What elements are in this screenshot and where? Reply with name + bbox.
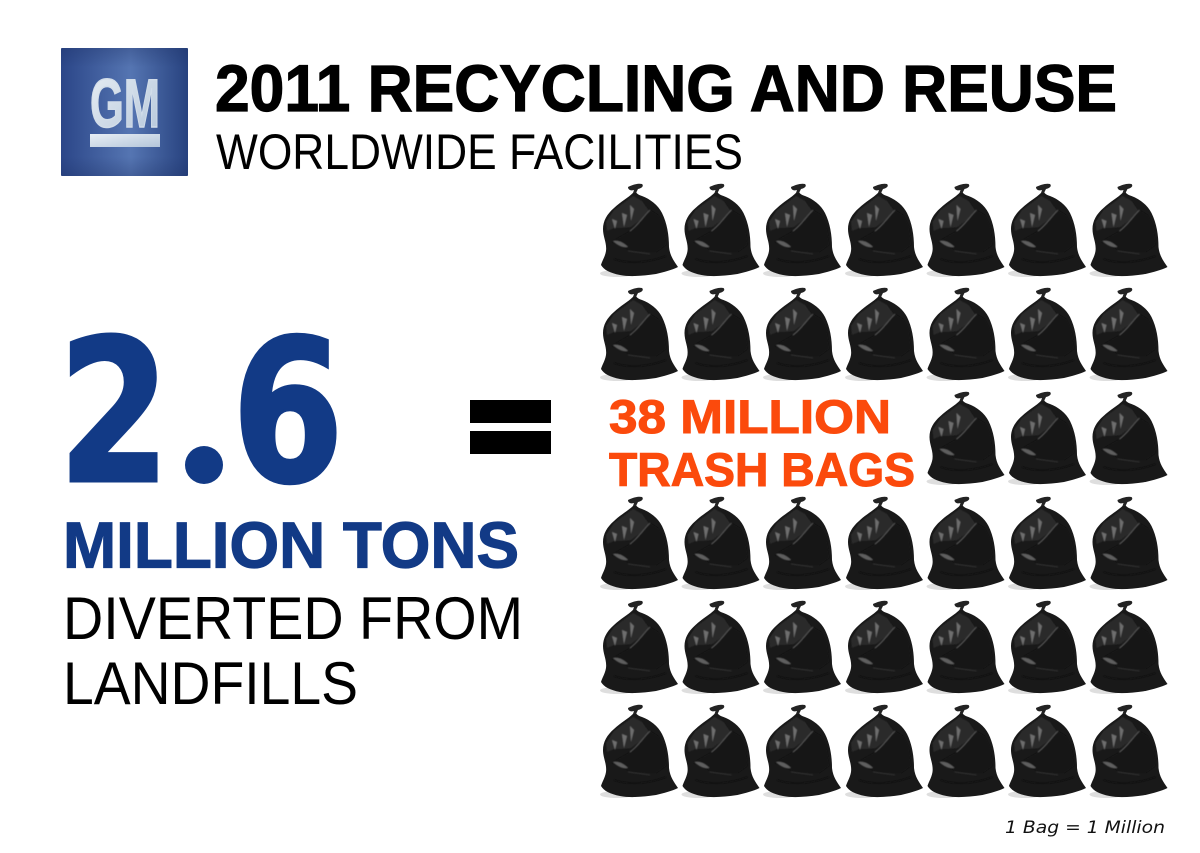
legend: 1 bag = 1 million: 1 Bag = 1 Million	[1005, 818, 1165, 838]
big number: 2.6: 2.6	[58, 297, 344, 528]
subtitle: WORLDWIDE FACILITIES	[216, 124, 743, 180]
icon: GM logo: GM	[90, 65, 160, 142]
text block: diverted from landfills: DIVERTED FROM	[63, 585, 523, 652]
heading: million tons: MILLION TONS	[63, 508, 519, 582]
equals sign	[470, 400, 551, 454]
callout: 38 million trash bags: 38 MILLION	[609, 390, 891, 443]
text block: diverted from landfills	[63, 585, 523, 717]
callout: 38 million trash bags	[609, 390, 915, 496]
pictogram: 38 trash bags, 1 bag = 1 million	[600, 184, 1168, 798]
callout: 38 million trash bags: TRASH BAGS	[609, 443, 915, 496]
icon: GM logo	[61, 48, 188, 176]
title: 2011 RECYCLING AND REUSE	[215, 51, 1117, 125]
text block: diverted from landfills: LANDFILLS	[63, 650, 358, 717]
